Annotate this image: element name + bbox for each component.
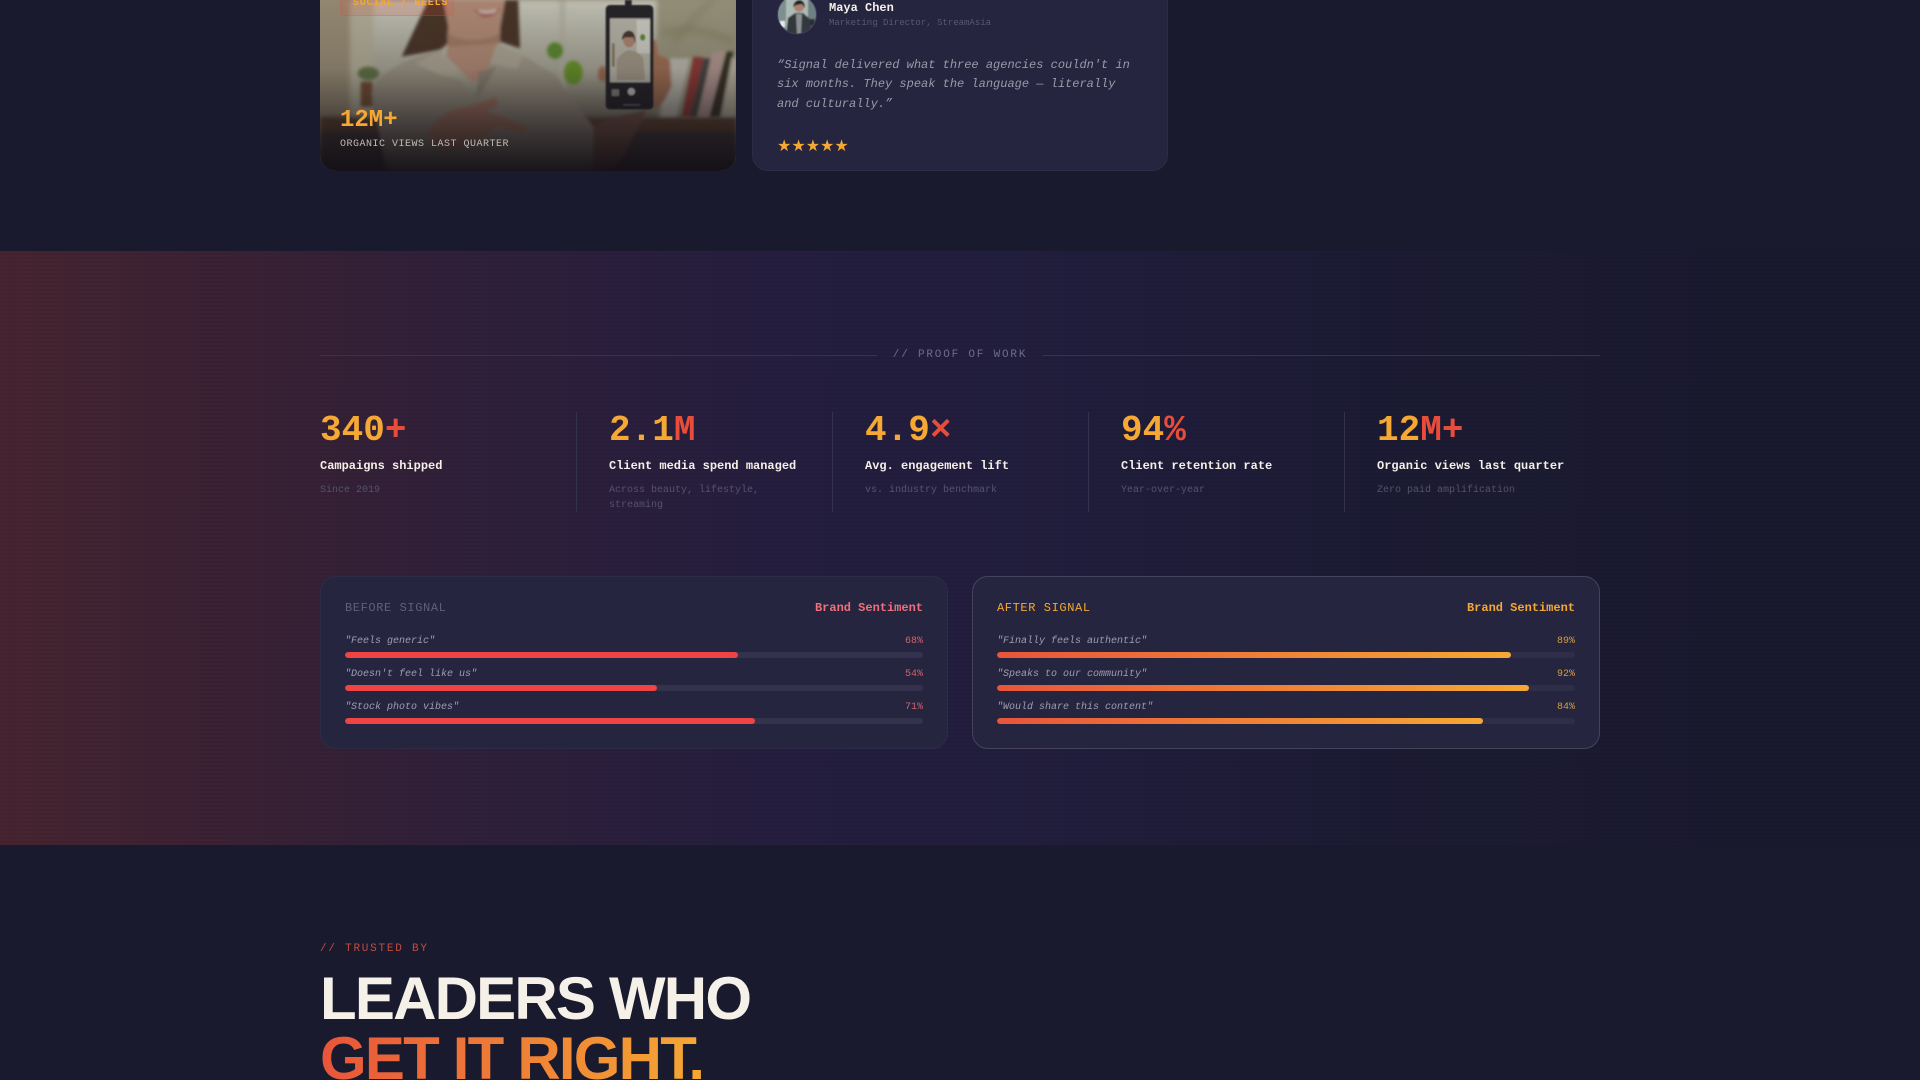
panel: before signal <box>320 576 948 749</box>
books <box>660 58 690 117</box>
avatar <box>777 0 817 34</box>
quote: and culturally.” <box>777 97 892 111</box>
shirt <box>372 47 623 173</box>
row value: 68% <box>905 636 923 647</box>
stat: organic views <box>1377 410 1564 496</box>
tag: social reels <box>340 0 454 16</box>
section heading: proof of work: // PROOF OF WORK <box>893 349 1027 361</box>
stat: media spend: 2.1M <box>609 410 695 450</box>
heading: leaders who get it right: LEADERS WHO <box>320 965 750 1032</box>
phone <box>606 0 653 109</box>
stat: engagement: Avg. engagement lift <box>865 459 1009 473</box>
row value: 71% <box>905 702 923 713</box>
gesturing hand <box>427 97 528 150</box>
stat: engagement: 4.9× <box>865 410 951 450</box>
row label: "Feels generic" <box>345 636 435 647</box>
panel: after signal <box>972 576 1600 749</box>
quote: “Signal delivered what three agencies couldn't in <box>777 58 1130 72</box>
row label: "Would share this content" <box>997 702 1153 713</box>
stat: organic views: 12M+ <box>1377 410 1463 450</box>
sentiment bar <box>345 685 923 691</box>
stat: retention <box>1121 410 1272 496</box>
row value: 84% <box>1557 702 1575 713</box>
row value: 54% <box>905 669 923 680</box>
sentiment bar <box>345 718 923 724</box>
sentiment bar <box>997 718 1575 724</box>
stat: engagement <box>865 410 1009 496</box>
sentiment bar <box>345 652 923 658</box>
stat: campaigns: Since 2019 <box>320 485 380 496</box>
plant <box>547 42 563 59</box>
heading: leaders who get it right <box>320 965 750 1080</box>
stat: retention: 94% <box>1121 410 1186 450</box>
quote: six months. They speak the language — literally <box>777 77 1115 91</box>
stat: campaigns: 340+ <box>320 410 406 450</box>
row label: "Finally feels authentic" <box>997 636 1147 647</box>
forearm <box>593 110 647 173</box>
stat: media spend: Across beauty, lifestyle, <box>609 485 759 496</box>
row label: "Doesn't feel like us" <box>345 669 477 680</box>
card title: BEFORE SIGNAL <box>345 601 446 615</box>
hair <box>402 0 460 57</box>
stat: media spend <box>609 410 796 511</box>
stat: retention: Year-over-year <box>1121 485 1205 496</box>
photo stat value: 12M+ <box>340 106 398 134</box>
panel: photo card <box>320 0 736 171</box>
author role: Marketing Director, StreamAsia <box>829 18 991 28</box>
stat: campaigns: Campaigns shipped <box>320 459 442 473</box>
panel: testimonial card <box>752 0 1168 171</box>
sentiment bar <box>997 685 1575 691</box>
row value: 92% <box>1557 669 1575 680</box>
neck and face <box>443 0 505 83</box>
stat: media spend: Client media spend managed <box>609 459 796 473</box>
card metric name: Brand Sentiment <box>815 601 923 615</box>
stat: organic views: Zero paid amplification <box>1377 485 1515 496</box>
fingers <box>643 40 672 108</box>
stat: media spend: streaming <box>609 500 663 511</box>
stat: organic views: Organic views last quarter <box>1377 459 1564 473</box>
sentiment bar <box>997 652 1575 658</box>
panel: proof of work band <box>0 251 1920 845</box>
stat: engagement: vs. industry benchmark <box>865 485 997 496</box>
row value: 89% <box>1557 636 1575 647</box>
stat: campaigns <box>320 410 442 496</box>
author name: Maya Chen <box>829 1 894 15</box>
photo: creator filming with phone <box>320 0 736 171</box>
eyebrow: trusted by: // TRUSTED BY <box>320 943 429 955</box>
quote <box>777 58 1130 111</box>
card metric name: Brand Sentiment <box>1467 601 1575 615</box>
photo stat caption: ORGANIC VIEWS LAST QUARTER <box>340 139 509 150</box>
row label: "Speaks to our community" <box>997 669 1147 680</box>
star rating: ★★★★★ <box>777 136 849 155</box>
row label: "Stock photo vibes" <box>345 702 459 713</box>
card title: AFTER SIGNAL <box>997 601 1091 615</box>
stat: retention: Client retention rate <box>1121 459 1272 473</box>
